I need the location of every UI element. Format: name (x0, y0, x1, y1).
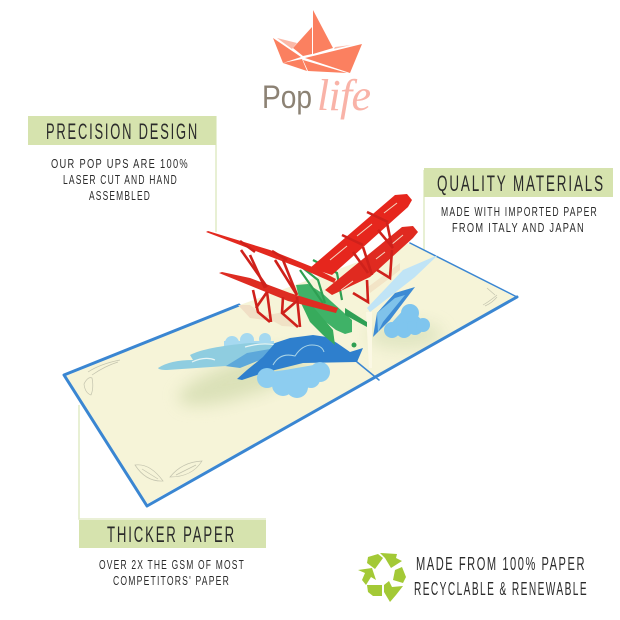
right wing struts (342, 212, 393, 302)
back blue cloud (224, 333, 274, 350)
body text: ASSEMBLED (89, 188, 151, 203)
logo (262, 10, 371, 120)
upper right wing (310, 194, 412, 275)
wing slots (330, 203, 403, 290)
front blue cloud (257, 362, 330, 398)
lower right wing (325, 226, 418, 295)
tail rods (206, 231, 336, 283)
card base (64, 243, 517, 506)
heading band (79, 520, 266, 548)
blue plane wing (158, 343, 285, 370)
red biplane (206, 194, 418, 327)
decorative feathers (84, 288, 497, 481)
body text (99, 557, 245, 588)
body text: LASER CUT AND HAND (63, 172, 178, 187)
wordmark (262, 71, 371, 120)
panel: thicker paper (79, 520, 266, 588)
wordmark: Pop (262, 79, 312, 115)
blue plane fuselage (237, 335, 363, 380)
recycling statement (414, 554, 588, 599)
heading band (28, 116, 216, 145)
icon: origami boat (273, 10, 362, 73)
panel: quality materials (424, 168, 613, 235)
beige pop-up backing (238, 263, 400, 368)
body text: COMPETITORS' PAPER (113, 573, 230, 588)
body text (51, 156, 189, 203)
pop-up card (64, 194, 517, 506)
callout lines (79, 116, 424, 519)
body text (441, 204, 598, 235)
heading band: PRECISION DESIGN (46, 119, 199, 144)
tail struts (240, 241, 300, 327)
green plane parts (296, 260, 367, 348)
body text: OVER 2X THE GSM OF MOST (99, 557, 245, 572)
right blue wing and cloud (367, 255, 438, 338)
wordmark: life (317, 71, 371, 120)
body text: OUR POP UPS ARE 100% (51, 156, 189, 171)
heading band: THICKER PAPER (107, 522, 236, 547)
panel: precision design (28, 116, 216, 203)
icon: recycle symbol (358, 553, 406, 602)
